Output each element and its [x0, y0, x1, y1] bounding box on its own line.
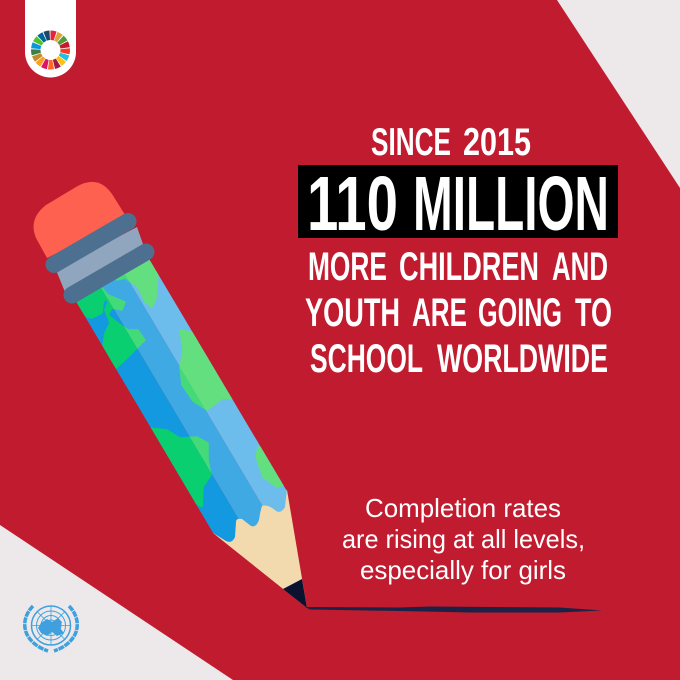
figure: 110 million	[307, 161, 609, 247]
supporting text: Completion rates	[365, 493, 561, 523]
supporting text	[342, 493, 585, 585]
ferrule lower band	[72, 252, 146, 295]
headline continuation: SCHOOL	[310, 337, 423, 381]
headline continuation: MORE	[308, 245, 387, 289]
headline continuation	[305, 245, 612, 381]
pencil globe body	[76, 260, 287, 542]
icon: SDG colour wheel	[30, 29, 71, 71]
pencil wood cone	[213, 490, 307, 608]
supporting text: are rising at all levels,	[342, 524, 585, 554]
supporting text: especially for girls	[360, 555, 566, 585]
headline continuation: GOING	[478, 291, 562, 335]
headline continuation: TO	[575, 291, 612, 335]
pencil illustration	[34, 182, 330, 608]
heading: since 2015: SINCE	[371, 121, 451, 164]
eraser	[34, 182, 127, 258]
metal ferrule	[56, 227, 145, 292]
figure: 110 million: 110	[307, 161, 398, 247]
pencil drawn line	[305, 606, 602, 612]
headline continuation: YOUTH	[305, 291, 400, 335]
headline continuation: ARE	[412, 291, 467, 335]
SDG logo tab	[25, 0, 76, 78]
headline continuation: CHILDREN	[399, 245, 539, 289]
ferrule upper band	[54, 222, 128, 264]
highlighted figure box	[298, 161, 618, 247]
heading: since 2015: 2015	[463, 121, 531, 164]
headline continuation: AND	[552, 245, 608, 289]
icon: UN emblem	[25, 606, 77, 651]
pencil lead tip	[283, 579, 307, 608]
